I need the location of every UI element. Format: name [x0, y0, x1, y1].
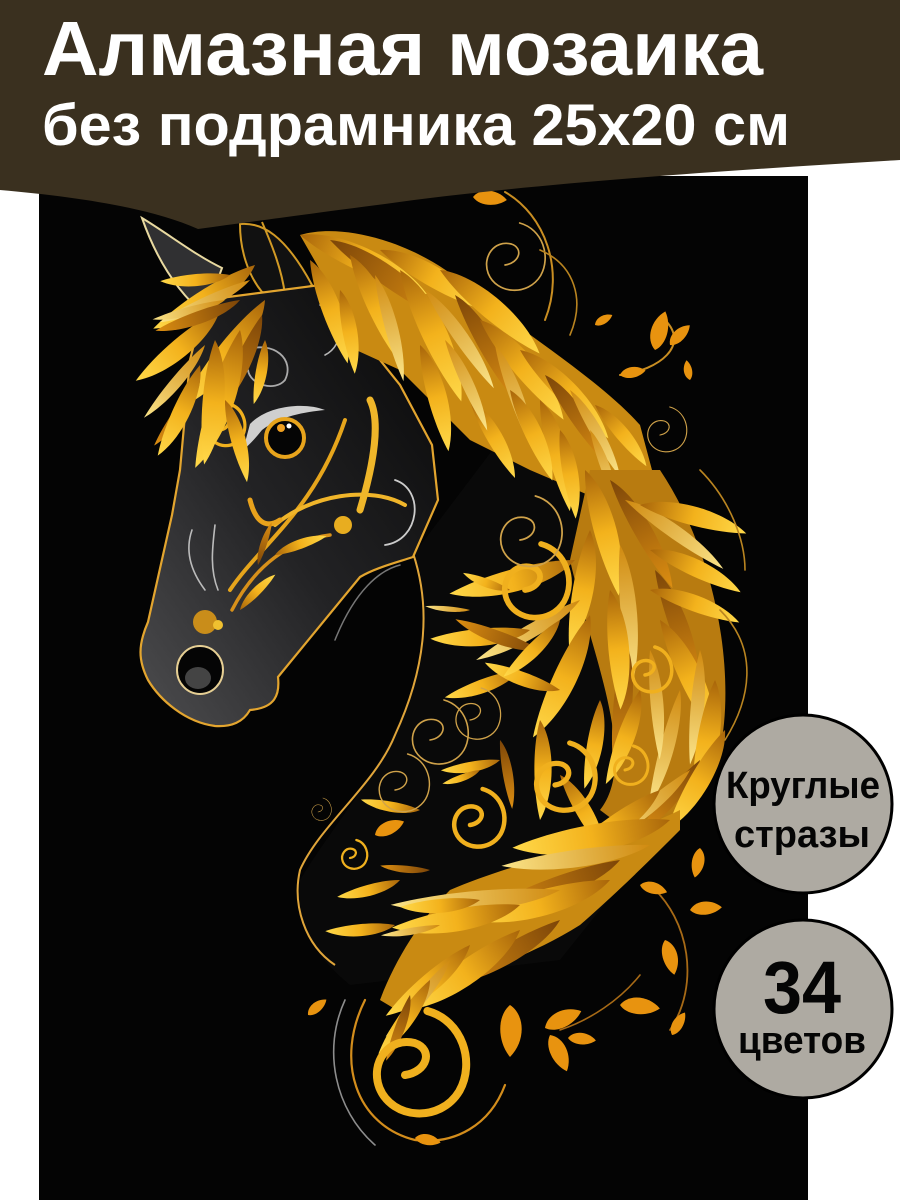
cheek ornament [189, 305, 415, 640]
mane: long plume [425, 466, 750, 870]
mane: forelock [132, 259, 277, 483]
horse neck outline [298, 553, 424, 965]
header banner [0, 0, 900, 229]
nostril [177, 646, 223, 694]
badge: 34 colours: цветов [738, 1020, 866, 1062]
mane: crest [297, 220, 660, 520]
badge: 34 colours [714, 920, 892, 1098]
subtitle: без подрамника 25х20 см [42, 93, 790, 158]
small leaves [305, 189, 722, 1147]
eye [243, 406, 325, 457]
flourishes [334, 192, 747, 1145]
badge: round rhinestones [714, 715, 892, 893]
badge: 34 colours: 34 [763, 946, 841, 1029]
title: Алмазная мозаика [42, 6, 764, 92]
mane: lower sweep [325, 757, 680, 1063]
badge: round rhinestones: стразы [734, 814, 870, 856]
horse head [140, 285, 438, 726]
badge: round rhinestones: Круглые [726, 765, 880, 807]
ears [142, 218, 312, 315]
swirls [312, 223, 687, 1113]
picture panel [39, 176, 808, 1200]
neck body [299, 440, 720, 985]
